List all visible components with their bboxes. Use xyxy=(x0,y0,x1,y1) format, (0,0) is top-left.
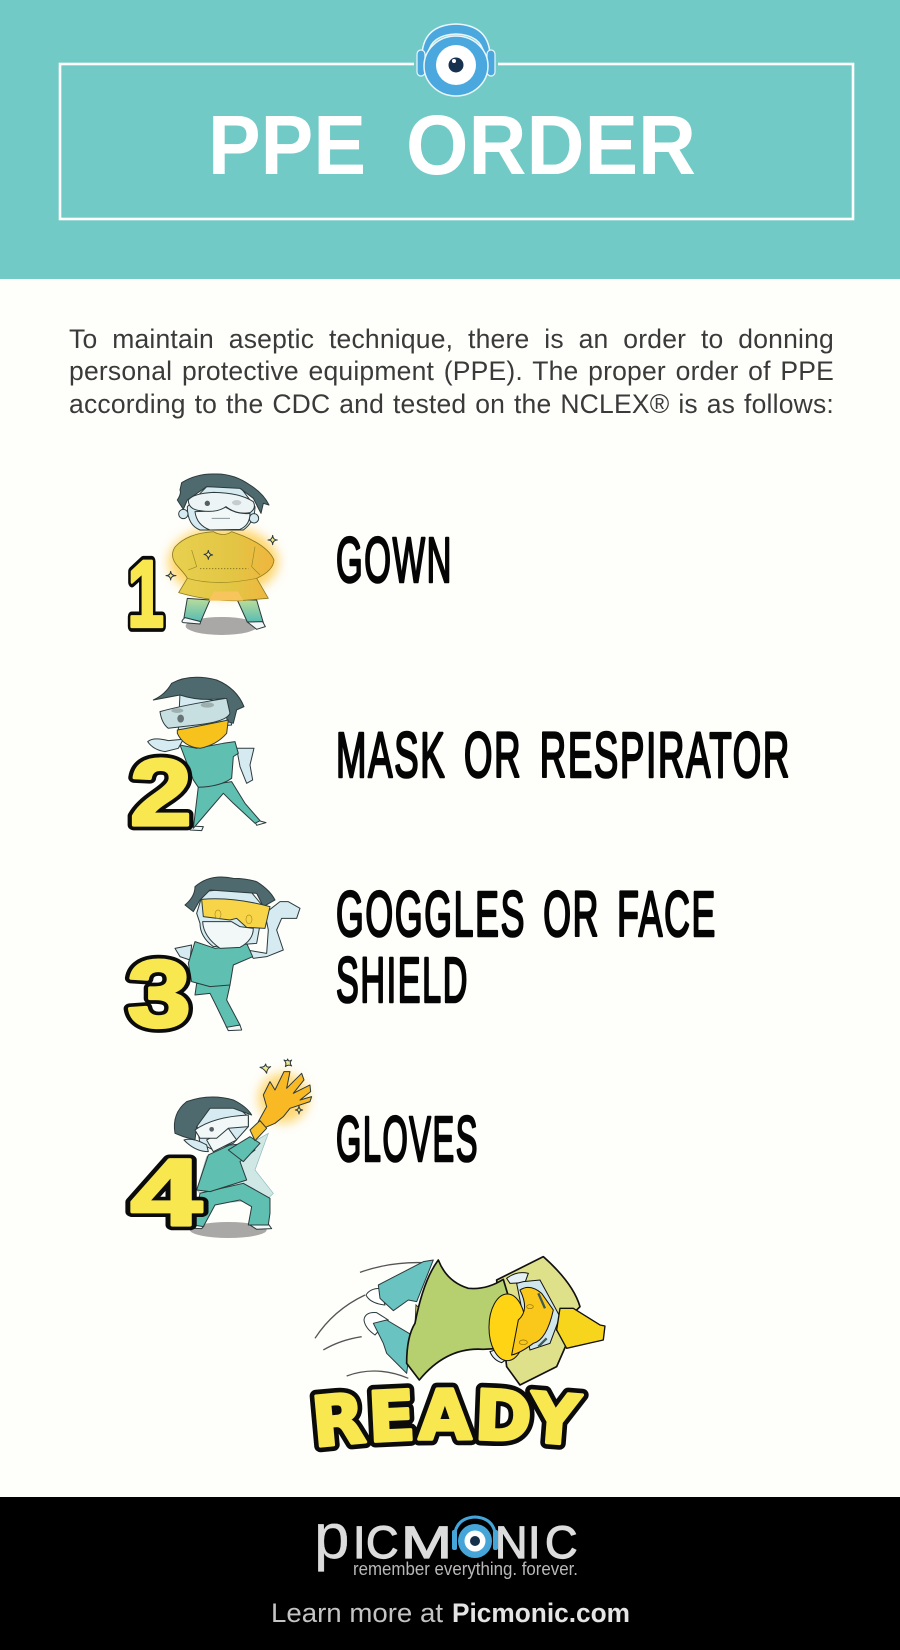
icon: eye with headphones xyxy=(452,1517,498,1558)
step 3: goggles or face shield xyxy=(127,877,717,1047)
title: PPE xyxy=(208,98,366,192)
footer logo xyxy=(314,1500,578,1579)
step 1: gown xyxy=(127,474,453,647)
motion lines xyxy=(315,1263,423,1378)
numeral 3: 3 xyxy=(127,941,191,1047)
step 4: gloves xyxy=(131,1059,479,1246)
illustration: person with goggles xyxy=(175,877,300,1031)
illustration: person in gown xyxy=(166,474,278,635)
footer band xyxy=(0,1497,900,1650)
illustration: flying person and READY badge xyxy=(310,1256,606,1452)
tagline: remember everything. forever. xyxy=(353,1559,578,1579)
title frame xyxy=(60,64,853,219)
wordmark left: M xyxy=(401,1517,452,1568)
flying person xyxy=(364,1257,605,1385)
header band xyxy=(0,0,900,279)
label: gown: GOWN xyxy=(336,524,453,596)
READY text badge: READY xyxy=(314,1387,584,1448)
step 3: goggles or face shield: SHIELD xyxy=(336,944,469,1016)
numeral 4: 4 xyxy=(131,1140,202,1246)
numeral 1: 1 xyxy=(127,541,164,647)
title: ORDER xyxy=(406,98,696,192)
footer link line: Learn more at xyxy=(271,1598,444,1628)
wordmark left xyxy=(314,1500,452,1572)
footer link line: Picmonic.com xyxy=(452,1598,630,1628)
illustration: person with mask xyxy=(148,677,266,831)
intro paragraph: To maintain aseptic technique, there is an order to donning xyxy=(69,324,834,354)
title xyxy=(208,98,696,192)
numeral 4: 4 xyxy=(131,1140,202,1246)
intro paragraph xyxy=(69,324,834,419)
numeral 1: 1 xyxy=(127,541,164,647)
intro paragraph: according to the CDC and tested on the NCLEX® is as follows: xyxy=(69,389,834,419)
READY text badge: READY xyxy=(310,1382,589,1452)
numeral 2: 2 xyxy=(130,740,192,846)
numeral 2: 2 xyxy=(130,740,192,846)
numeral 3: 3 xyxy=(127,941,191,1047)
wordmark right: NIC xyxy=(495,1517,578,1568)
wordmark left: IC xyxy=(353,1517,398,1568)
wordmark left: p xyxy=(314,1500,350,1572)
step 2: mask or respirator xyxy=(130,677,791,846)
footer link line xyxy=(271,1598,630,1628)
intro paragraph: personal protective equipment (PPE). The proper order of PPE xyxy=(69,356,834,386)
illustration: person with gloves xyxy=(174,1059,312,1238)
numeral 1 xyxy=(127,541,164,647)
label: gloves: GLOVES xyxy=(336,1103,479,1175)
icon: eye with headphones logo xyxy=(414,24,498,96)
